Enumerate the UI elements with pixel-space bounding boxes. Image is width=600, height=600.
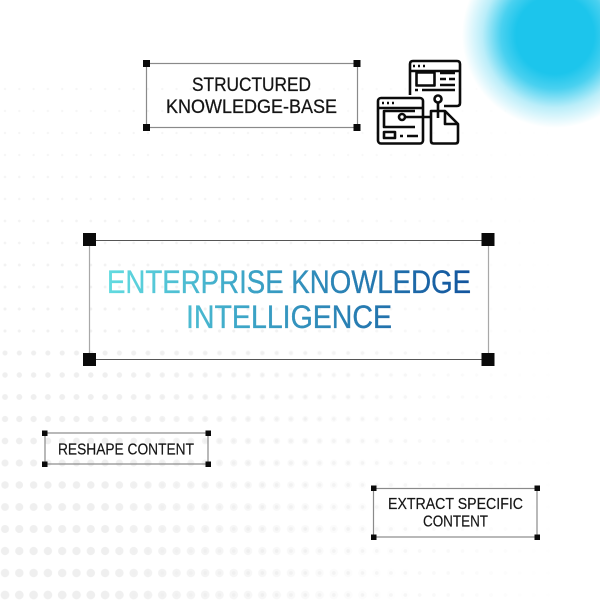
box: main title xyxy=(83,233,494,366)
box: structured knowledge-base: KNOWLEDGE-BASE xyxy=(166,97,337,118)
cyan glow blob xyxy=(462,0,600,128)
box: reshape content xyxy=(42,430,211,467)
icon: web windows and document xyxy=(378,61,460,144)
title: INTELLIGENCE xyxy=(186,299,392,335)
box: extract specific content: EXTRACT SPECIFIC xyxy=(388,496,523,513)
title xyxy=(107,264,471,335)
box: reshape content: RESHAPE CONTENT xyxy=(58,442,194,458)
box: extract specific content xyxy=(371,486,540,540)
box: structured knowledge-base xyxy=(143,60,360,131)
box: structured knowledge-base: STRUCTURED xyxy=(192,75,311,96)
box: extract specific content: CONTENT xyxy=(423,514,488,530)
title: ENTERPRISE KNOWLEDGE xyxy=(107,264,471,300)
dotted background pattern xyxy=(0,88,407,600)
